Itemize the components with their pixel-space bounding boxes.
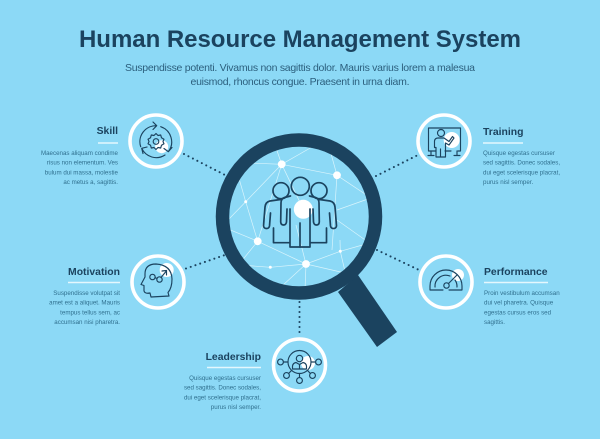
panel: training — [418, 115, 560, 186]
panel: motivation — [49, 256, 184, 326]
text: training: Quisque egestas cursuser — [483, 150, 555, 157]
icon: motivation head — [132, 256, 184, 308]
icon: skill cycle gear — [130, 115, 182, 167]
text: leadership: Quisque egestas cursuser — [189, 375, 261, 382]
icon: leadership network — [274, 339, 326, 391]
dotted connector: training — [376, 156, 417, 176]
text: performance: Proin vestibulum accumsan — [484, 290, 560, 297]
text: training: purus nisl semper. — [483, 179, 533, 186]
heading: training: Training — [483, 127, 523, 138]
text: performance: sagittis. — [484, 319, 505, 326]
icon: people group — [264, 177, 336, 247]
dotted connector: performance — [377, 250, 419, 270]
text: leadership: dui eget scelerisque placrat, — [184, 394, 261, 402]
text: motivation: tempus tellus sem, ac — [60, 310, 120, 316]
text: leadership: purus nisl semper. — [211, 404, 261, 411]
text: training: sed sagittis. Donec sodales, — [483, 160, 560, 167]
heading: motivation: Motivation — [68, 267, 120, 278]
text: motivation: accumsan nisi pharetra. — [54, 319, 120, 326]
magnifier — [222, 140, 397, 347]
text: performance: dui vel pharetra. Quisque — [484, 300, 554, 307]
subtitle: euismod, rhoncus congue. Praesent in urna diam. — [190, 76, 410, 88]
text: leadership: sed sagittis. Donec sodales, — [184, 385, 261, 392]
network inside magnifier lens — [228, 145, 368, 290]
text: skill: ac metus a, sagittis. — [63, 179, 118, 186]
text: motivation: Suspendisse volutpat sit — [53, 290, 120, 297]
text: skill: bulum dui massa, molestie — [45, 170, 119, 176]
title: Human Resource Management System — [79, 26, 521, 53]
panel: skill — [41, 115, 182, 186]
text: performance: egestas cursus eros sed — [484, 310, 552, 316]
heading: leadership: Leadership — [206, 352, 261, 363]
panel: performance — [420, 256, 560, 326]
dotted connector: leadership — [298, 302, 301, 335]
heading: skill: Skill — [97, 126, 118, 137]
text: training: dui eget scelerisque placrat, — [483, 170, 560, 176]
text: skill: Maecenas aliquam condime — [41, 150, 119, 157]
text: motivation: amet est a aliquet. Mauris — [49, 300, 120, 307]
subtitle: Suspendisse potenti. Vivamus non sagittis dolor. Mauris varius lorem a malesua — [125, 62, 475, 74]
dotted connector: motivation — [186, 255, 225, 268]
panel: leadership — [184, 339, 326, 411]
heading: performance: Performance — [484, 267, 548, 278]
text: skill: risus non elementum. Ves — [47, 160, 118, 167]
icon: training presenter — [418, 115, 470, 167]
icon: performance gauge — [420, 256, 472, 308]
dotted connector: skill — [184, 154, 225, 175]
